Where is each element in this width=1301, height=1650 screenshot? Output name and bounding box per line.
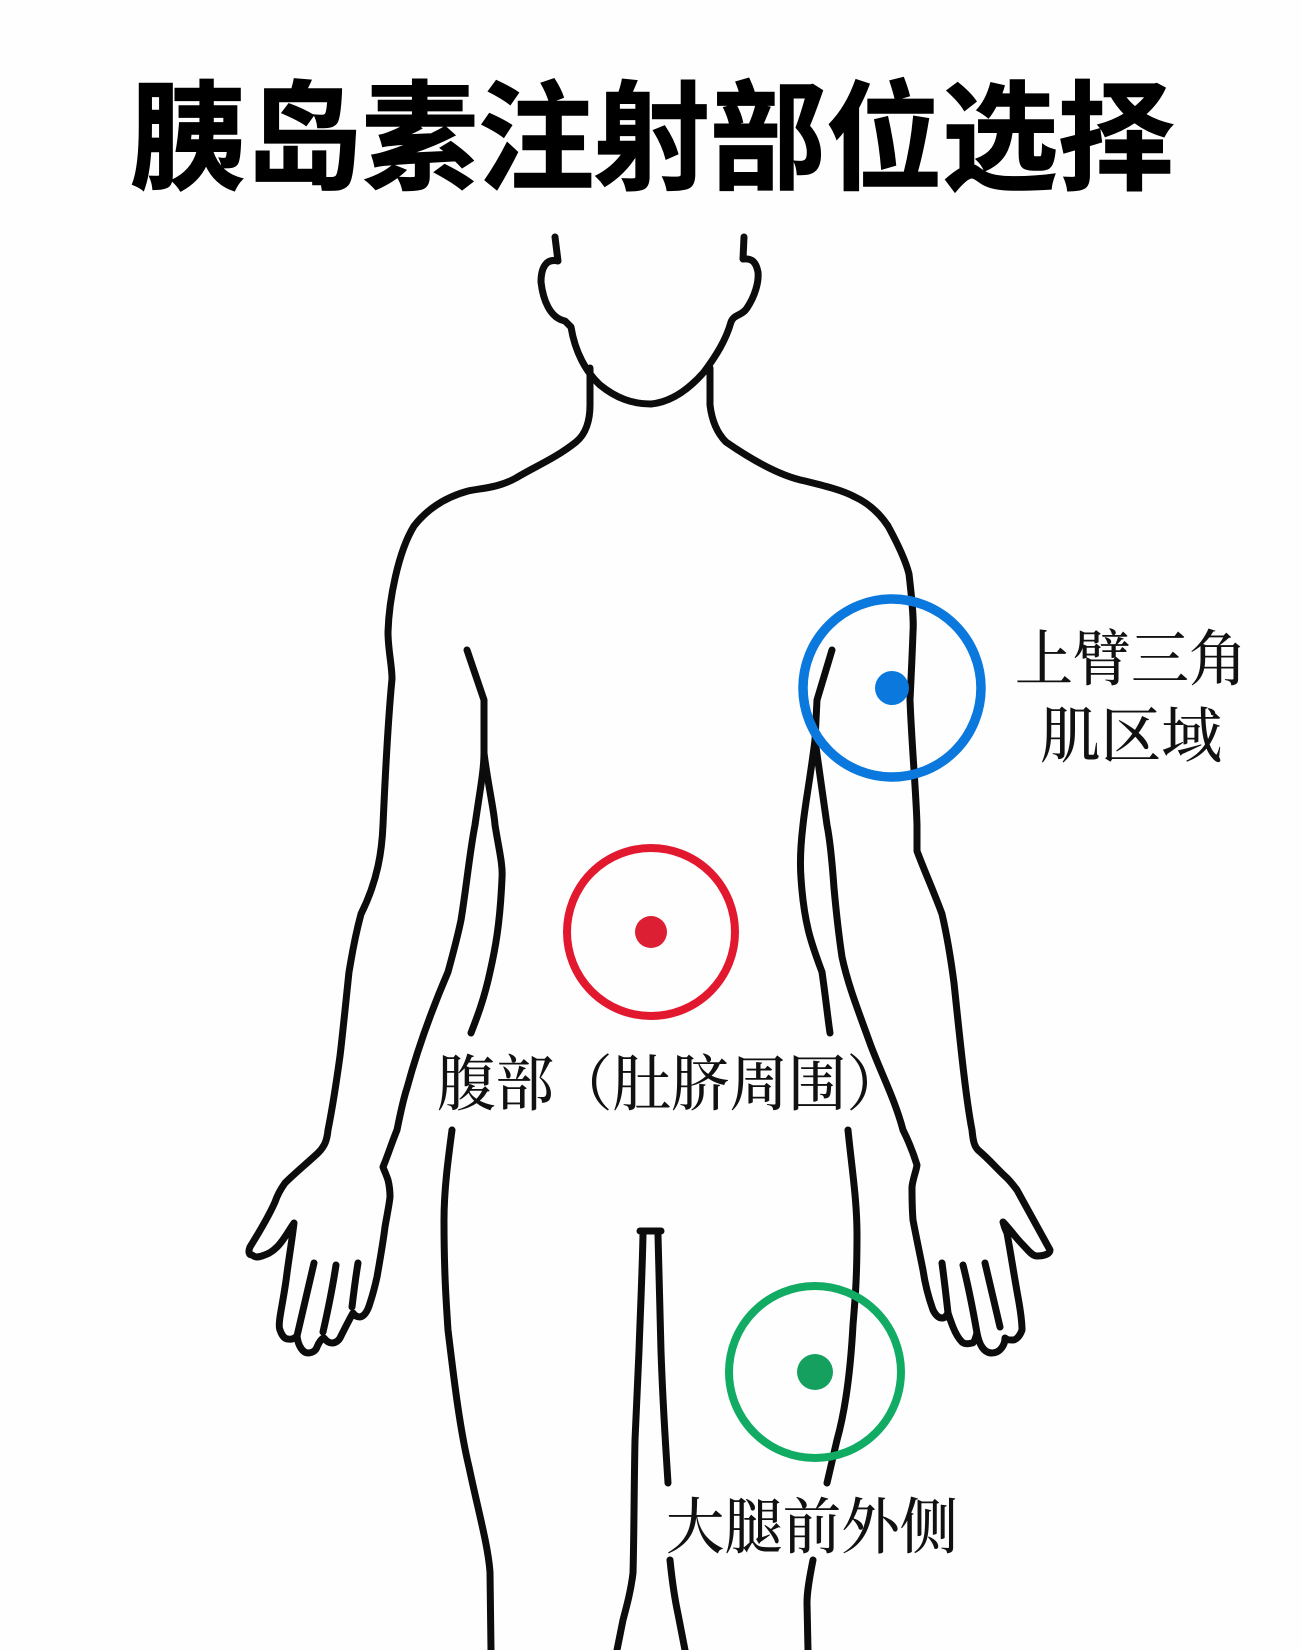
left neck, shoulder and outer arm <box>249 368 590 1353</box>
head and jaw <box>541 237 758 404</box>
right finger lines <box>942 1263 1000 1333</box>
marker: upper arm site <box>803 599 981 777</box>
left finger lines <box>297 1263 358 1336</box>
label: thigh: 大腿前外侧 <box>666 1495 958 1562</box>
label: upper arm: 上臂三角 <box>1015 627 1247 694</box>
label: upper arm: 肌区域 <box>1040 704 1222 771</box>
marker: thigh site <box>729 1286 901 1458</box>
body outline <box>249 237 1050 1650</box>
left leg <box>444 1130 491 1650</box>
title: 胰岛素注射部位选择 <box>130 74 1174 206</box>
right neck, shoulder and outer arm <box>710 368 1050 1353</box>
marker: abdomen site <box>567 848 735 1016</box>
right inner waist <box>800 740 830 1033</box>
crotch and inseams <box>617 1231 685 1650</box>
label: upper arm <box>1015 627 1247 771</box>
right leg <box>807 1130 857 1650</box>
label: abdomen: 腹部（肚脐周围） <box>437 1052 905 1119</box>
left inner waist <box>471 753 502 1033</box>
